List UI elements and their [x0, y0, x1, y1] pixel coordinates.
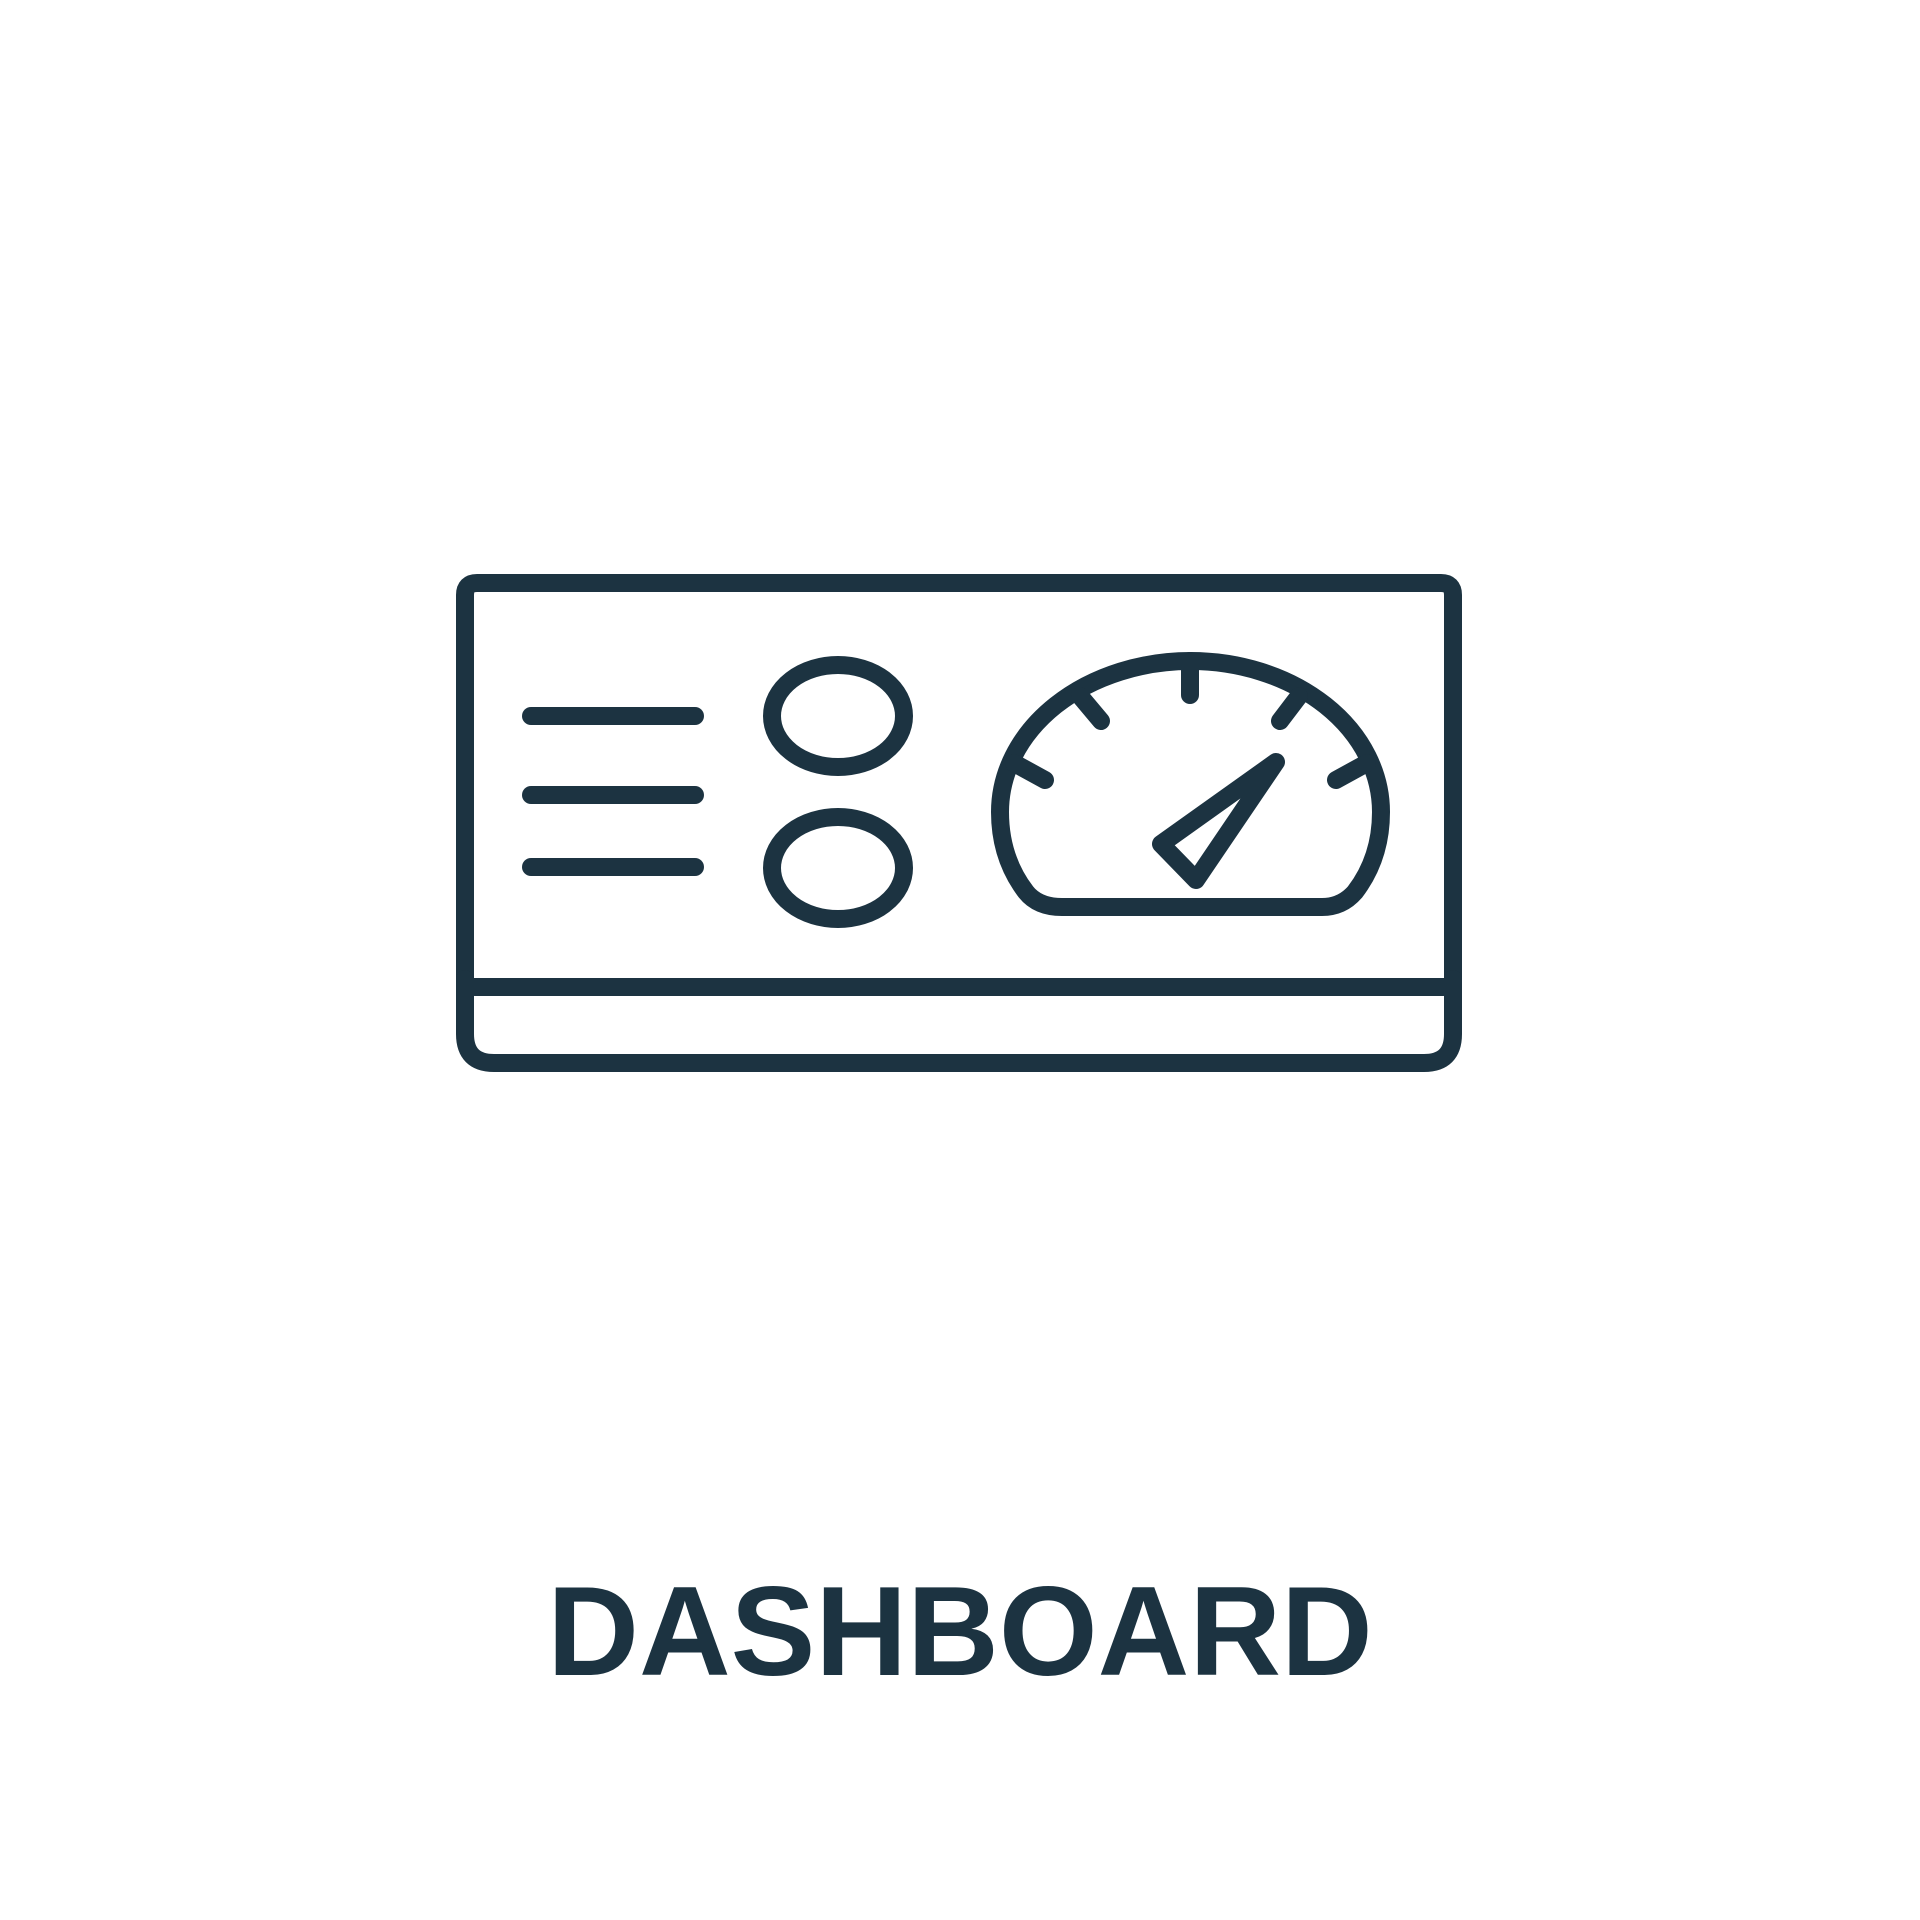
- gauge: [1000, 661, 1381, 907]
- text lines: [531, 716, 695, 867]
- toggle ellipses: [772, 665, 904, 919]
- dashboard frame: [465, 583, 1453, 1063]
- title: DASHBOARD: [547, 1560, 1373, 1702]
